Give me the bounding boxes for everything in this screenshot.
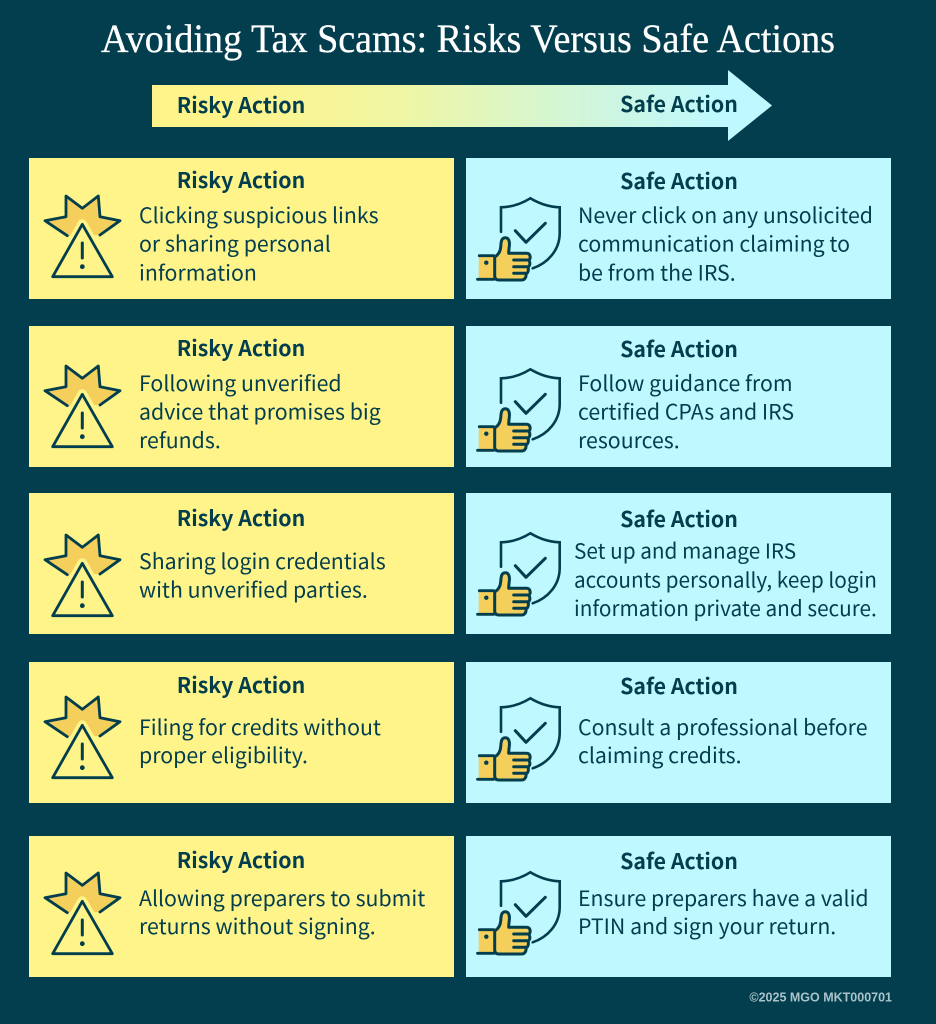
title: Avoiding Tax Scams: Risks Versus Safe Actions — [101, 16, 835, 61]
panel: safe action 1 — [466, 158, 891, 299]
text block: information — [139, 256, 257, 288]
arrow label: risky: Risky Action — [177, 89, 305, 120]
text block: proper eligibility. — [139, 739, 308, 770]
text block: claiming credits. — [578, 739, 742, 770]
icon: shield and thumbs up — [478, 533, 560, 615]
text block: Set up and manage IRS — [574, 534, 796, 564]
heading: Risky Action — [177, 502, 305, 533]
heading: Safe Action — [620, 503, 738, 534]
text block: returns without signing. — [139, 910, 376, 941]
text block: advice that promises big — [139, 396, 381, 426]
text block: accounts personally, keep login — [574, 564, 877, 594]
text block: be from the IRS. — [578, 256, 736, 288]
gradient arrow: risky to safe — [152, 70, 772, 141]
heading: Safe Action — [620, 670, 738, 701]
text block: Never click on any unsolicited — [578, 199, 873, 230]
heading: Risky Action — [177, 332, 305, 363]
panel: risky action 1 — [29, 158, 454, 299]
text block: Clicking suspicious links — [139, 199, 379, 230]
panel: risky action 4 — [29, 662, 454, 803]
text block: information private and secure. — [574, 592, 877, 622]
heading: Safe Action — [620, 333, 738, 364]
panel: risky action 5 — [29, 836, 454, 977]
text block: with unverified parties. — [139, 574, 368, 604]
text block: Allowing preparers to submit — [139, 882, 425, 913]
text block: Follow guidance from — [578, 367, 793, 398]
text block: Filing for credits without — [139, 711, 381, 742]
heading: Risky Action — [177, 844, 305, 875]
arrow label: safe: Safe Action — [620, 88, 738, 119]
text block: Sharing login credentials — [139, 545, 386, 576]
icon: warning — [45, 873, 120, 954]
text block: Consult a professional before — [578, 711, 868, 742]
heading: Risky Action — [177, 164, 305, 195]
text block: Following unverified — [139, 367, 342, 398]
text block: Ensure preparers have a valid — [578, 882, 869, 913]
panel: safe action 2 — [466, 326, 891, 467]
icon: warning — [45, 366, 120, 447]
icon: warning — [45, 196, 120, 277]
heading: Risky Action — [177, 669, 305, 700]
text block: resources. — [578, 424, 680, 455]
icon: shield and thumbs up — [478, 698, 560, 780]
icon: warning — [45, 697, 120, 778]
text block: or sharing personal — [139, 228, 331, 258]
heading: Safe Action — [620, 845, 738, 876]
icon: shield and thumbs up — [478, 369, 560, 451]
text block: certified CPAs and IRS — [578, 396, 794, 426]
panel: risky action 3 — [29, 493, 454, 634]
icon: warning — [45, 535, 120, 616]
text block: communication claiming to — [578, 228, 850, 258]
icon: shield and thumbs up — [478, 198, 560, 280]
footer copyright: ©2025 MGO MKT000701 — [749, 990, 892, 1004]
panel: safe action 4 — [466, 662, 891, 803]
icon: shield and thumbs up — [478, 872, 560, 954]
panel: safe action 3 — [466, 493, 891, 634]
panel: safe action 5 — [466, 836, 891, 977]
heading: Safe Action — [620, 165, 738, 196]
text block: PTIN and sign your return. — [578, 910, 836, 941]
text block: refunds. — [139, 424, 221, 455]
panel: risky action 2 — [29, 326, 454, 467]
